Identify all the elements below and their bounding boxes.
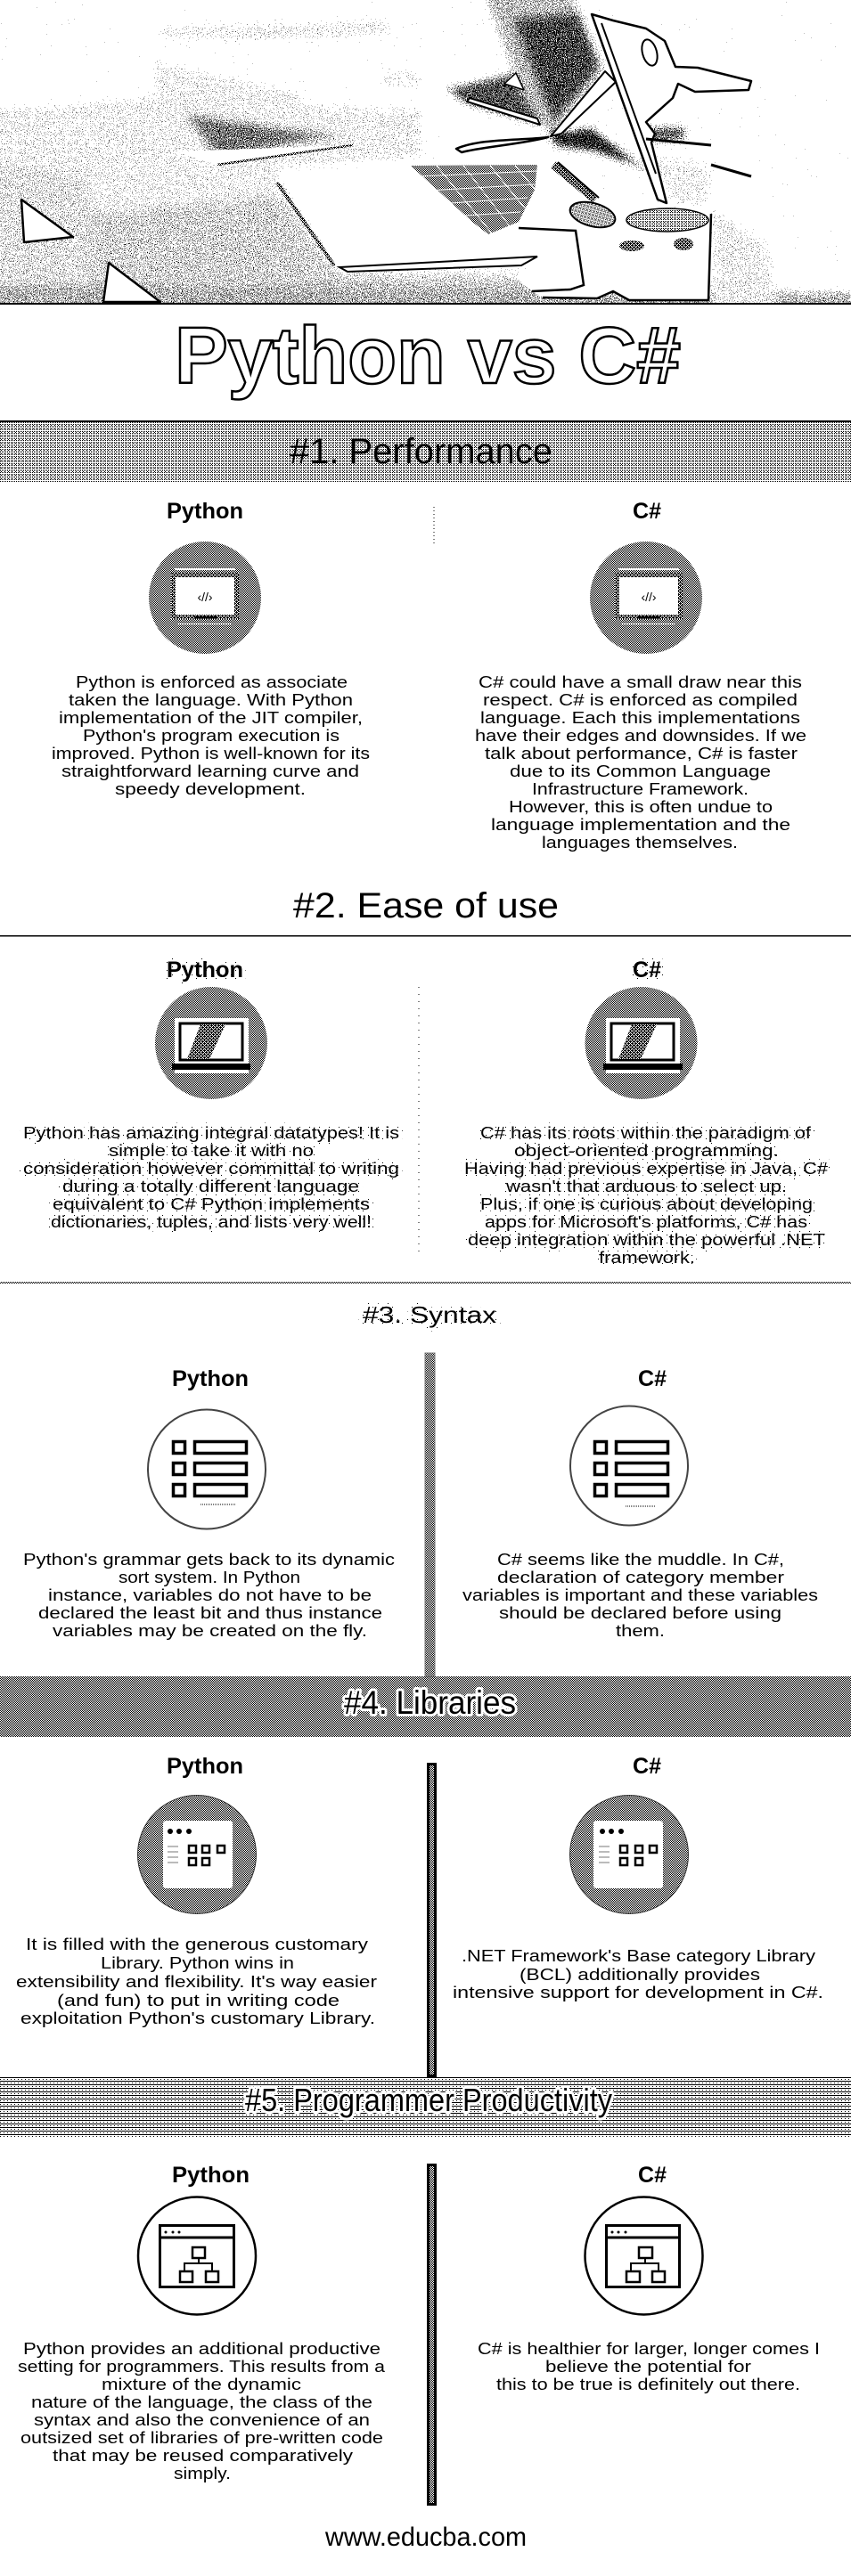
footer url: www.educba.com — [324, 2523, 527, 2552]
text: C# syntax: C# seems like the muddle. In C#, — [497, 1551, 784, 1569]
section 2 heading: Ease of use: #2. Ease of use — [293, 886, 559, 925]
text: Python productivity: that may be reused comparatively — [53, 2447, 353, 2465]
vertical divider — [428, 2164, 435, 2505]
text: C# syntax: declaration of category member — [497, 1569, 784, 1586]
heading: C#: C# — [638, 1366, 667, 1391]
text: Python syntax: declared the least bit and thus instance — [38, 1604, 382, 1622]
text: Python performance: straightforward learning curve and — [61, 762, 359, 780]
text: Python ease of use: simple to take it with no — [109, 1142, 314, 1160]
section 1 banner: Performance: #1. Performance — [290, 432, 552, 471]
text: Python ease of use: Python has amazing integral datatypes! It is — [23, 1124, 399, 1142]
section 1 banner: Performance — [0, 420, 851, 482]
panel: performance comparison — [52, 499, 806, 852]
text: C# syntax: them. — [616, 1622, 665, 1640]
hero image: laptop on desk — [0, 0, 851, 322]
text: Python performance: Python's program execution is — [83, 727, 340, 745]
text: Python performance: speedy development. — [115, 780, 306, 798]
text: C# productivity: believe the potential for — [545, 2358, 751, 2376]
text: Python libraries: (and fun) to put in writing code — [57, 1992, 340, 2009]
panel: productivity comparison — [18, 2163, 820, 2505]
text: C# performance: C# could have a small draw near this — [479, 673, 802, 691]
text: Python productivity — [18, 2340, 386, 2482]
hand and lower shapes — [516, 198, 711, 300]
text: Python libraries — [16, 1936, 377, 2027]
panel: ease of use comparison — [23, 958, 828, 1267]
text: C# performance: language implementation and the — [491, 816, 790, 834]
section 4 banner: Libraries — [0, 1676, 851, 1737]
heading: C#: C# — [633, 958, 661, 982]
text: C# ease of use: framework. — [599, 1249, 695, 1267]
section 5 banner: Programmer Productivity: #5. Programmer Productivity — [245, 2082, 612, 2118]
heading: C#: C# — [638, 2163, 667, 2188]
icon: laptop right — [585, 987, 697, 1099]
text: C# productivity — [478, 2340, 820, 2393]
text: Python productivity: mixture of the dynamic — [102, 2376, 301, 2393]
text: Python productivity: simply. — [174, 2465, 231, 2482]
icon: sitemap window right — [585, 2197, 702, 2314]
text: C# ease of use: Plus, if one is curious about developing — [480, 1195, 813, 1213]
text: Python ease of use: dictionaries, tuples, and lists very well! — [51, 1213, 372, 1231]
title: Python vs C# — [175, 312, 681, 401]
heading: Python: Python — [172, 1366, 249, 1391]
icon: list right — [570, 1406, 688, 1525]
heading: C#: C# — [633, 499, 661, 524]
icon: app window left — [137, 1796, 257, 1913]
text: Python ease of use — [23, 1124, 399, 1231]
laptop screen and arm — [456, 71, 616, 200]
text: C# libraries: (BCL) additionally provides — [520, 1966, 760, 1984]
icon: sitemap window left — [138, 2197, 256, 2314]
text: Python productivity: setting for programmers. This results from a — [18, 2358, 386, 2376]
text: C# syntax — [462, 1551, 818, 1640]
heading: Python: Python — [167, 499, 243, 524]
text: Python libraries: extensibility and flexibility. It's way easier — [16, 1973, 377, 1991]
text: Python productivity: Python provides an additional productive — [23, 2340, 380, 2358]
dotted divider — [433, 507, 435, 546]
text: Python ease of use: equivalent to C# Python implements — [53, 1195, 370, 1213]
text: C# ease of use: wasn't that arduous to select up. — [505, 1178, 787, 1195]
text: Python productivity: outsized set of libraries of pre-written code — [20, 2429, 383, 2447]
text: C# performance: Infrastructure Framework. — [532, 780, 749, 798]
text: Python ease of use: during a totally different language — [62, 1178, 359, 1195]
text: Python ease of use: consideration however committal to writing — [23, 1160, 399, 1178]
text: Python libraries: exploitation Python's customary Library. — [20, 2009, 375, 2027]
icon: app window right — [570, 1796, 688, 1913]
icon: code monitor right: ‹//› — [641, 590, 657, 604]
icon: code monitor left: ‹//› — [197, 590, 213, 604]
heading: Python: Python — [167, 958, 243, 982]
icon: code monitor left — [149, 542, 261, 654]
vertical divider — [428, 1764, 435, 2075]
text: Python syntax: Python's grammar gets back to its dynamic — [23, 1551, 395, 1569]
text: C# ease of use: deep integration within the powerful .NET — [468, 1231, 825, 1249]
text: Python libraries: It is filled with the generous customary — [26, 1936, 368, 1953]
text: C# ease of use: apps for Microsoft's platforms, C# has — [485, 1213, 807, 1231]
text: Python performance — [52, 673, 370, 798]
icon: list left — [148, 1409, 266, 1528]
vertical divider — [425, 1353, 435, 1676]
text: C# performance: language. Each this implementations — [480, 709, 800, 727]
text: Python syntax: variables may be created on the fly. — [53, 1622, 367, 1640]
text: C# ease of use: Having had previous expertise in Java, C# — [464, 1160, 828, 1178]
text: C# libraries: .NET Framework's Base category Library — [462, 1947, 815, 1965]
text: C# productivity: C# is healthier for larger, longer comes I — [478, 2340, 820, 2358]
text: C# productivity: this to be true is definitely out there. — [496, 2376, 800, 2393]
text: Python productivity: nature of the language, the class of the — [31, 2393, 372, 2411]
right white figure — [592, 14, 751, 203]
text: C# performance: talk about performance, C# is faster — [485, 745, 798, 762]
text: C# ease of use: object-oriented programming. — [514, 1142, 779, 1160]
text: C# ease of use: C# has its roots within the paradigm of — [480, 1124, 812, 1142]
heading: C#: C# — [633, 1754, 661, 1779]
text: Python syntax: instance, variables do not have to be — [48, 1586, 372, 1604]
text: Python syntax — [23, 1551, 395, 1640]
text: Python performance: taken the language. With Python — [69, 691, 353, 709]
text: C# performance: respect. C# is enforced as compiled — [483, 691, 798, 709]
section 4 banner: Libraries: #4. Libraries — [344, 1684, 516, 1721]
text: C# libraries — [453, 1947, 823, 2001]
text: Python performance: Python is enforced as associate — [76, 673, 348, 691]
text: C# performance — [475, 673, 806, 852]
icon: white triangles — [21, 200, 160, 302]
laptop base — [174, 145, 576, 272]
dotted divider — [418, 987, 420, 1253]
text: Python syntax: sort system. In Python — [119, 1569, 300, 1586]
icon: code monitor right — [590, 542, 702, 654]
text: Python performance: implementation of the JIT compiler, — [59, 709, 363, 727]
icon: laptop left — [155, 987, 267, 1099]
panel: syntax comparison — [23, 1353, 818, 1676]
text: C# libraries: intensive support for development in C#. — [453, 1984, 823, 2001]
text: Python productivity: syntax and also the convenience of an — [34, 2411, 370, 2429]
section 3 heading: Syntax: #3. Syntax — [363, 1301, 496, 1328]
text: C# syntax: variables is important and these variables — [462, 1586, 818, 1604]
text: Python performance: improved. Python is well-known for its — [52, 745, 370, 762]
heading: Python: Python — [167, 1754, 243, 1779]
text: C# performance: due to its Common Language — [510, 762, 771, 780]
text: C# ease of use — [464, 1124, 828, 1267]
section 5 banner: Programmer Productivity — [0, 2077, 851, 2138]
text: Python libraries: Library. Python wins in — [101, 1954, 294, 1972]
text: C# syntax: should be declared before using — [499, 1604, 781, 1622]
text: C# performance: languages themselves. — [542, 834, 738, 852]
text: C# performance: have their edges and downsides. If we — [475, 727, 806, 745]
panel: libraries comparison — [16, 1754, 823, 2075]
heading: Python: Python — [172, 2163, 250, 2188]
text: C# performance: However, this is often undue to — [509, 798, 773, 816]
